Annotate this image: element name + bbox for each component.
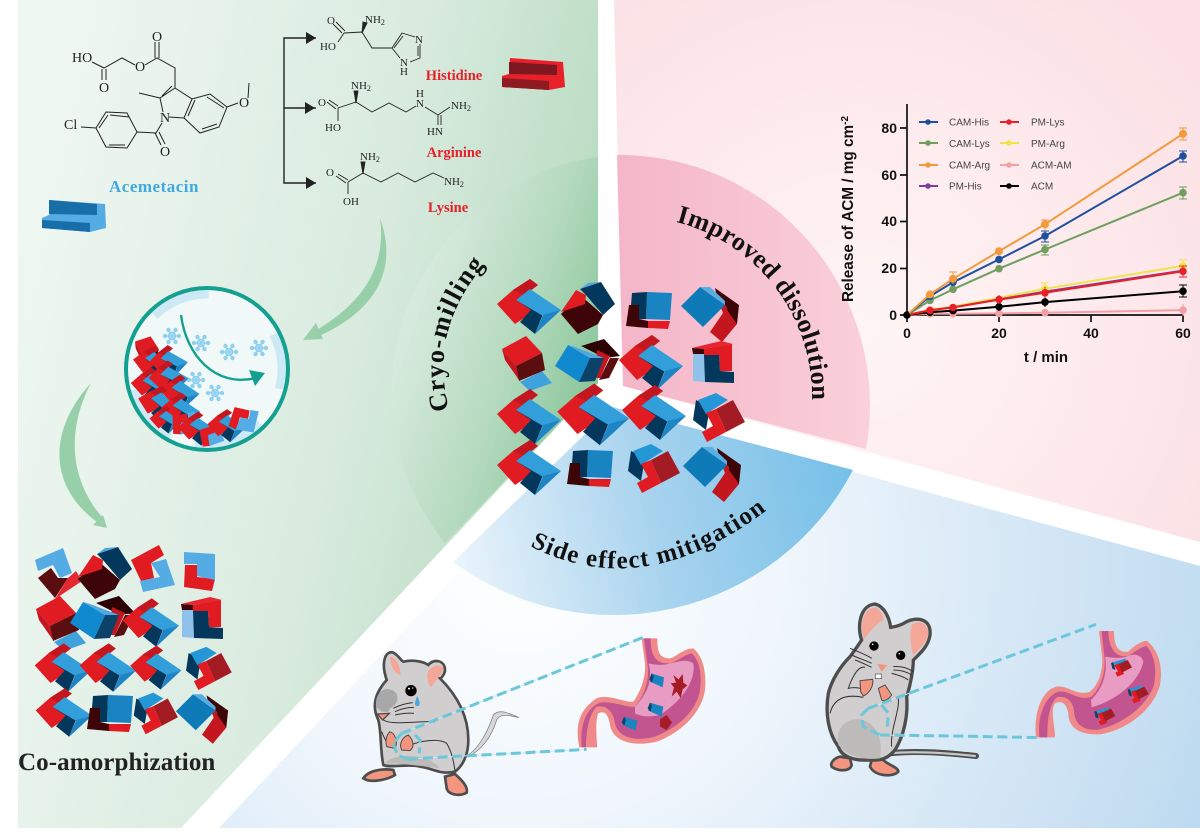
cube cluster: co-amorphization <box>35 545 232 744</box>
body <box>827 604 930 760</box>
structure: Arginine molecule: NH <box>451 100 467 112</box>
structure: Acemetacin molecule: N <box>160 111 170 126</box>
tail <box>890 752 976 756</box>
axis tick labels: 40 <box>1083 325 1099 341</box>
cube cluster: centre <box>497 279 745 502</box>
hands <box>386 732 413 751</box>
ulcer wound <box>660 674 687 730</box>
axis tick labels: 80 <box>881 120 897 136</box>
stomach composite blocks <box>1094 659 1149 725</box>
structure: Histidine molecule: N <box>400 57 408 69</box>
panel: side effect blue background <box>219 407 1200 828</box>
structure: Acemetacin molecule: O <box>160 145 170 160</box>
structure: Arginine molecule: N <box>416 98 424 110</box>
illustration: healthy stomach <box>1036 631 1161 737</box>
feet <box>831 757 898 775</box>
belly shade <box>838 719 881 759</box>
axis tick labels: 0 <box>903 325 911 341</box>
structure: Histidine molecule <box>320 14 423 78</box>
sector: cryo-milling <box>392 157 598 543</box>
structure: Lysine molecule: NH <box>444 176 460 188</box>
axes <box>900 104 1183 322</box>
y axis title: Release of ACM / mg cm <box>840 125 857 302</box>
structure: Acemetacin molecule <box>64 30 249 160</box>
circle: cryo-mill jar <box>126 288 288 450</box>
label: Arginine: Arginine <box>427 145 482 161</box>
axis tick labels: 60 <box>1175 325 1191 341</box>
snowflakes <box>163 328 268 401</box>
structure: Histidine molecule: O <box>327 15 335 27</box>
series: PM-Lys <box>907 266 1187 315</box>
structure: Lysine molecule: 2 <box>376 155 380 164</box>
structure: Lysine molecule: O <box>326 167 334 179</box>
axis tick labels: 0 <box>889 307 897 323</box>
stomach residue blocks <box>622 673 664 731</box>
axis tick labels: 20 <box>881 260 897 276</box>
structure: Histidine molecule: 2 <box>381 18 385 27</box>
tail <box>468 712 519 757</box>
legend: CAM-Lys <box>949 139 990 150</box>
whiskers and arms <box>830 648 913 747</box>
tail highlight <box>890 752 975 756</box>
structure: Histidine molecule: H <box>400 66 408 78</box>
structure: Arginine molecule: 2 <box>367 84 371 93</box>
origin marker <box>904 312 910 318</box>
series: ACM <box>904 285 1187 318</box>
belly shade <box>385 756 440 768</box>
structure: Lysine molecule <box>326 151 464 208</box>
eye <box>405 685 417 696</box>
eyes <box>869 641 905 660</box>
snout shade <box>376 689 397 712</box>
arrow: mill rotation <box>181 315 265 386</box>
structure: Lysine molecule: NH <box>360 151 376 163</box>
ear left <box>862 607 883 640</box>
x axis title: t / min <box>1024 349 1068 366</box>
rear foot <box>445 774 467 795</box>
series: PM-Arg <box>907 260 1187 315</box>
heading: Improved dissolution: Improved dissolution <box>676 206 828 400</box>
structure: Acemetacin molecule: Cl <box>64 118 77 133</box>
legend: PM-His <box>949 182 982 192</box>
legend: PM-Arg <box>1031 139 1065 150</box>
legend: CAM-Arg <box>949 160 990 172</box>
legend: ACM <box>1031 182 1053 192</box>
icon: blue acemetacin block <box>42 200 106 232</box>
structure: Acemetacin molecule: O <box>239 96 249 111</box>
structure: Arginine molecule <box>318 80 471 138</box>
structure: Arginine molecule: 2 <box>467 104 471 113</box>
series: ACM-AM <box>907 304 1186 317</box>
sector: side effect mitigation <box>453 407 853 615</box>
heading: Side effect mitigation: Side effect mitigation <box>532 503 766 569</box>
structure: Lysine molecule: OH <box>343 196 359 208</box>
axis tick labels: 40 <box>881 213 897 229</box>
ear right <box>911 622 928 655</box>
structure: Acemetacin molecule: O <box>99 81 109 96</box>
structure: Arginine molecule: NH <box>351 80 367 92</box>
illustration: sick mouse <box>363 652 519 795</box>
legend <box>919 118 1072 192</box>
structure: Arginine molecule: HN <box>427 126 443 138</box>
nose <box>377 713 389 720</box>
dashed zoom lines: sick mouse <box>393 637 643 759</box>
whiskers and arms <box>382 703 455 771</box>
legend: PM-Lys <box>1031 118 1065 128</box>
structure: Histidine molecule: N <box>415 34 423 46</box>
arrow: green curved to mill <box>303 218 386 340</box>
sector: improved dissolution <box>617 155 870 449</box>
series: CAM-His <box>907 151 1187 315</box>
axis tick labels: 20 <box>991 325 1007 341</box>
structure: Arginine molecule: O <box>318 97 326 109</box>
panel: improved dissolution pink background <box>614 0 1200 542</box>
structure: Acemetacin molecule: O <box>135 60 145 75</box>
label: Histidine: Histidine <box>426 68 483 84</box>
front foot <box>363 769 395 781</box>
hands <box>860 679 892 701</box>
legend: ACM-AM <box>1031 160 1072 172</box>
structure: Histidine molecule: HO <box>320 41 336 53</box>
series: CAM-Arg <box>907 128 1187 315</box>
legend: CAM-His <box>949 118 989 128</box>
illustration: healthy mouse <box>827 604 976 775</box>
structure: Acemetacin molecule: O <box>152 30 162 45</box>
tear <box>415 696 420 706</box>
dashed zoom lines: healthy mouse <box>862 624 1096 738</box>
illustration: damaged stomach <box>578 638 705 747</box>
heading: Cryo-milling: Cryo-milling <box>429 257 487 410</box>
series: CAM-Lys <box>907 187 1187 315</box>
series: PM-His <box>907 271 1183 315</box>
icon: red histidine block <box>502 58 565 90</box>
chart: ACM release over time <box>840 104 1191 366</box>
heading: Co-amorphization: Co-amorphization <box>18 749 215 776</box>
milled cube pile <box>131 334 259 448</box>
y axis title: -2 <box>840 116 851 125</box>
structure: Arginine molecule: H <box>416 88 424 100</box>
structure: Acemetacin molecule: HO <box>72 51 92 66</box>
arrow: green curved to co-amorphous <box>59 383 107 528</box>
label: Lysine: Lysine <box>428 200 469 216</box>
panel: co-amorphization green background <box>18 0 598 828</box>
ear left <box>390 657 401 675</box>
structure: Arginine molecule: HO <box>325 122 341 134</box>
ear right <box>427 666 443 687</box>
structure: Lysine molecule: 2 <box>460 180 464 189</box>
label: Acemetacin: Acemetacin <box>109 177 199 196</box>
body <box>375 652 468 773</box>
structure: Histidine molecule: NH <box>365 14 381 26</box>
axis tick labels <box>881 120 1191 341</box>
axis tick labels: 60 <box>881 167 897 183</box>
nose and tooth <box>875 664 887 679</box>
arrows: bracket to amino acids <box>284 32 316 189</box>
